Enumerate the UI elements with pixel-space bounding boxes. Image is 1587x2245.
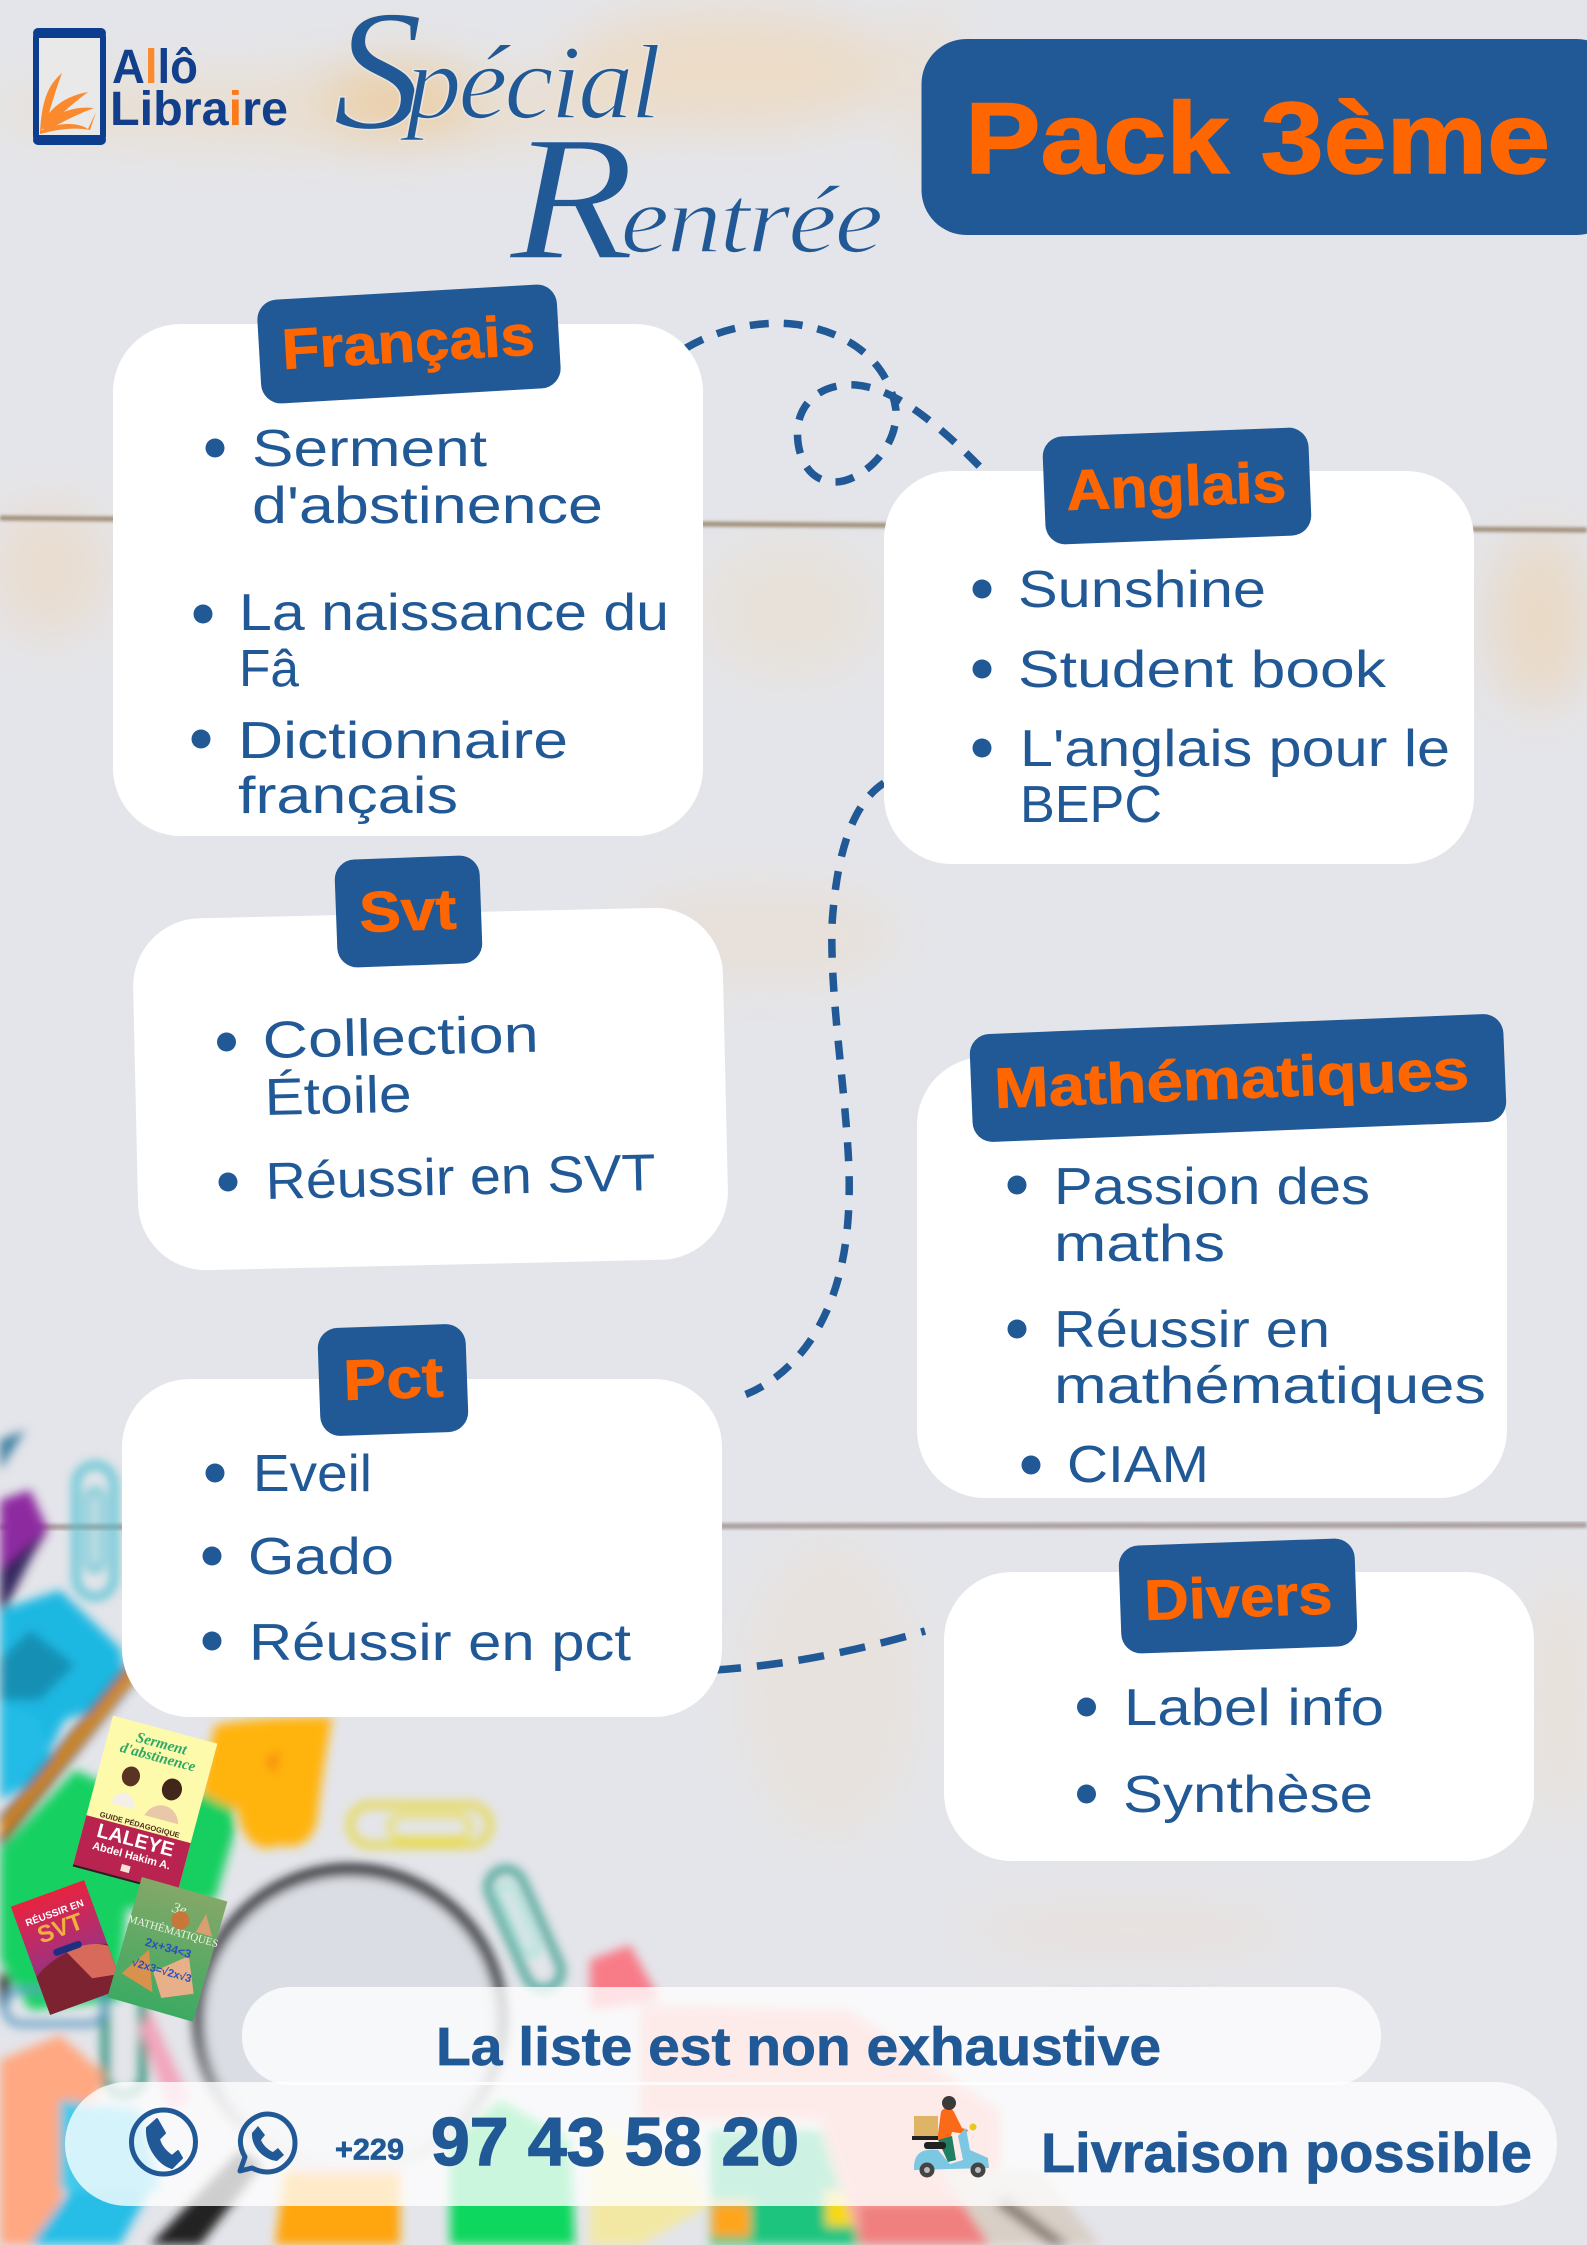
icon: phone with open book bbox=[33, 28, 106, 145]
delivery text: Livraison possible bbox=[1041, 2121, 1532, 2184]
heading tab: Divers: Divers bbox=[1143, 1562, 1333, 1633]
logo text: Libraire bbox=[110, 83, 288, 136]
book cover: Réussir en SVT: RÉUSSIR EN bbox=[24, 1896, 85, 1929]
panel: Anglais bbox=[884, 427, 1474, 864]
heading tab: Pct: Pct bbox=[342, 1346, 444, 1413]
logo: Allô Libraire bbox=[33, 28, 288, 145]
list: Mathématiques books: maths bbox=[1054, 1215, 1225, 1273]
heading tab: Divers bbox=[1118, 1538, 1358, 1654]
logo text: Allô bbox=[112, 41, 198, 94]
list: Mathématiques books: Passion des bbox=[1054, 1158, 1370, 1216]
title: Spécial Rentrée bbox=[333, 0, 881, 297]
list: Svt books: Collection bbox=[262, 1006, 539, 1070]
book cover: Serment d'abstinence: d'abstinence bbox=[118, 1740, 198, 1776]
book cover: Mathématiques 3e bbox=[106, 1877, 230, 2022]
title: Spécial Rentrée: R bbox=[509, 99, 634, 297]
panel: Mathématiques bbox=[917, 1013, 1507, 1498]
list: Mathématiques books bbox=[1008, 1158, 1486, 1494]
list: Pct books: Réussir en pct bbox=[249, 1614, 632, 1672]
list: Pct books: Gado bbox=[248, 1528, 394, 1586]
list: Français books: Dictionnaire bbox=[238, 712, 568, 770]
panel: Divers bbox=[944, 1538, 1534, 1861]
book cover: Mathématiques 3e: √2x3=√2x√3 bbox=[131, 1957, 193, 1985]
panel: Pct bbox=[122, 1323, 722, 1717]
list: Svt books: Étoile bbox=[264, 1066, 412, 1127]
heading tab: Français: Français bbox=[280, 304, 536, 382]
book cover: Serment d'abstinence: Abdel Hakim A. bbox=[91, 1840, 172, 1872]
dashed connector: Français to Anglais with loop bbox=[686, 323, 985, 482]
list: Anglais books: Student book bbox=[1018, 641, 1387, 699]
list: Pct books bbox=[202, 1445, 632, 1672]
list: Divers books: Label info bbox=[1124, 1679, 1384, 1737]
list: Français books: français bbox=[238, 767, 458, 825]
icon: delivery scooter bbox=[912, 2096, 989, 2178]
heading tab: Svt bbox=[334, 855, 483, 968]
icon: WhatsApp bbox=[240, 2114, 295, 2172]
list: Mathématiques books: CIAM bbox=[1067, 1436, 1209, 1494]
book cover: Serment d'abstinence: GUIDE PÉDAGOGIQUE bbox=[99, 1810, 181, 1840]
title: Spécial Rentrée: entrée bbox=[621, 166, 881, 273]
panel: Svt bbox=[132, 855, 729, 1272]
book cover: Serment d'abstinence bbox=[73, 1716, 217, 1894]
list: Divers books: Synthèse bbox=[1123, 1766, 1373, 1824]
heading tab: Anglais: Anglais bbox=[1065, 451, 1287, 523]
phone number: 97 43 58 20 bbox=[431, 2104, 799, 2180]
book cover: Mathématiques 3e: 3e bbox=[169, 1900, 189, 1919]
list: Divers books bbox=[1077, 1679, 1384, 1824]
list: Français books bbox=[192, 420, 669, 825]
heading tab: Mathématiques: Mathématiques bbox=[993, 1038, 1470, 1121]
dashed connector: Anglais to Pct bbox=[735, 783, 884, 1398]
list: Mathématiques books: Réussir en bbox=[1054, 1301, 1330, 1359]
book cover: Réussir en SVT bbox=[11, 1880, 123, 2015]
book cover: Mathématiques 3e: MATHÉMATIQUES bbox=[126, 1913, 220, 1950]
list: Mathématiques books: mathématiques bbox=[1054, 1357, 1486, 1415]
contact bar bbox=[65, 2082, 1557, 2206]
list: Anglais books: L'anglais pour le bbox=[1020, 720, 1450, 778]
list: Anglais books: BEPC bbox=[1020, 776, 1162, 834]
pill: La liste est non exhaustive bbox=[242, 1987, 1381, 2085]
list: Svt books bbox=[217, 1006, 656, 1211]
heading tab: Mathématiques bbox=[969, 1013, 1507, 1143]
list: Svt books: Réussir en SVT bbox=[265, 1144, 656, 1211]
book covers collage bbox=[11, 1716, 230, 2022]
banner: Pack 3ème: Pack 3ème bbox=[965, 83, 1550, 195]
list: Anglais books bbox=[972, 561, 1450, 834]
heading tab: Pct bbox=[317, 1323, 469, 1437]
panel: Français bbox=[113, 283, 703, 836]
heading tab: Svt: Svt bbox=[358, 877, 457, 945]
list: Pct books: Eveil bbox=[253, 1445, 372, 1503]
heading tab: Anglais bbox=[1042, 427, 1312, 545]
list: Français books: Fâ bbox=[239, 640, 299, 698]
logo text bbox=[110, 41, 288, 136]
book cover: Mathématiques 3e: 2x+34<3 bbox=[144, 1935, 193, 1961]
heading tab: Français bbox=[256, 283, 562, 405]
background: blurred school supplies bbox=[0, 1430, 1100, 2245]
icon: telephone bbox=[132, 2110, 196, 2174]
banner: Pack 3ème bbox=[922, 39, 1587, 235]
book cover: Serment d'abstinence: LALEYE bbox=[94, 1820, 176, 1862]
phone prefix: +229 bbox=[335, 2134, 404, 2166]
book cover: Serment d'abstinence: Serment bbox=[134, 1730, 189, 1759]
list: Français books: d'abstinence bbox=[252, 477, 603, 535]
list: Français books: Serment bbox=[252, 420, 488, 478]
list: Anglais books: Sunshine bbox=[1018, 561, 1266, 619]
dashed connector: Pct to Divers bbox=[715, 1631, 925, 1670]
title: Spécial Rentrée: pécial bbox=[399, 24, 660, 141]
list: Français books: La naissance du bbox=[239, 584, 669, 642]
pill: La liste est non exhaustive: La liste est non exhaustive bbox=[436, 2017, 1161, 2077]
book cover: Réussir en SVT: SVT bbox=[34, 1908, 87, 1949]
